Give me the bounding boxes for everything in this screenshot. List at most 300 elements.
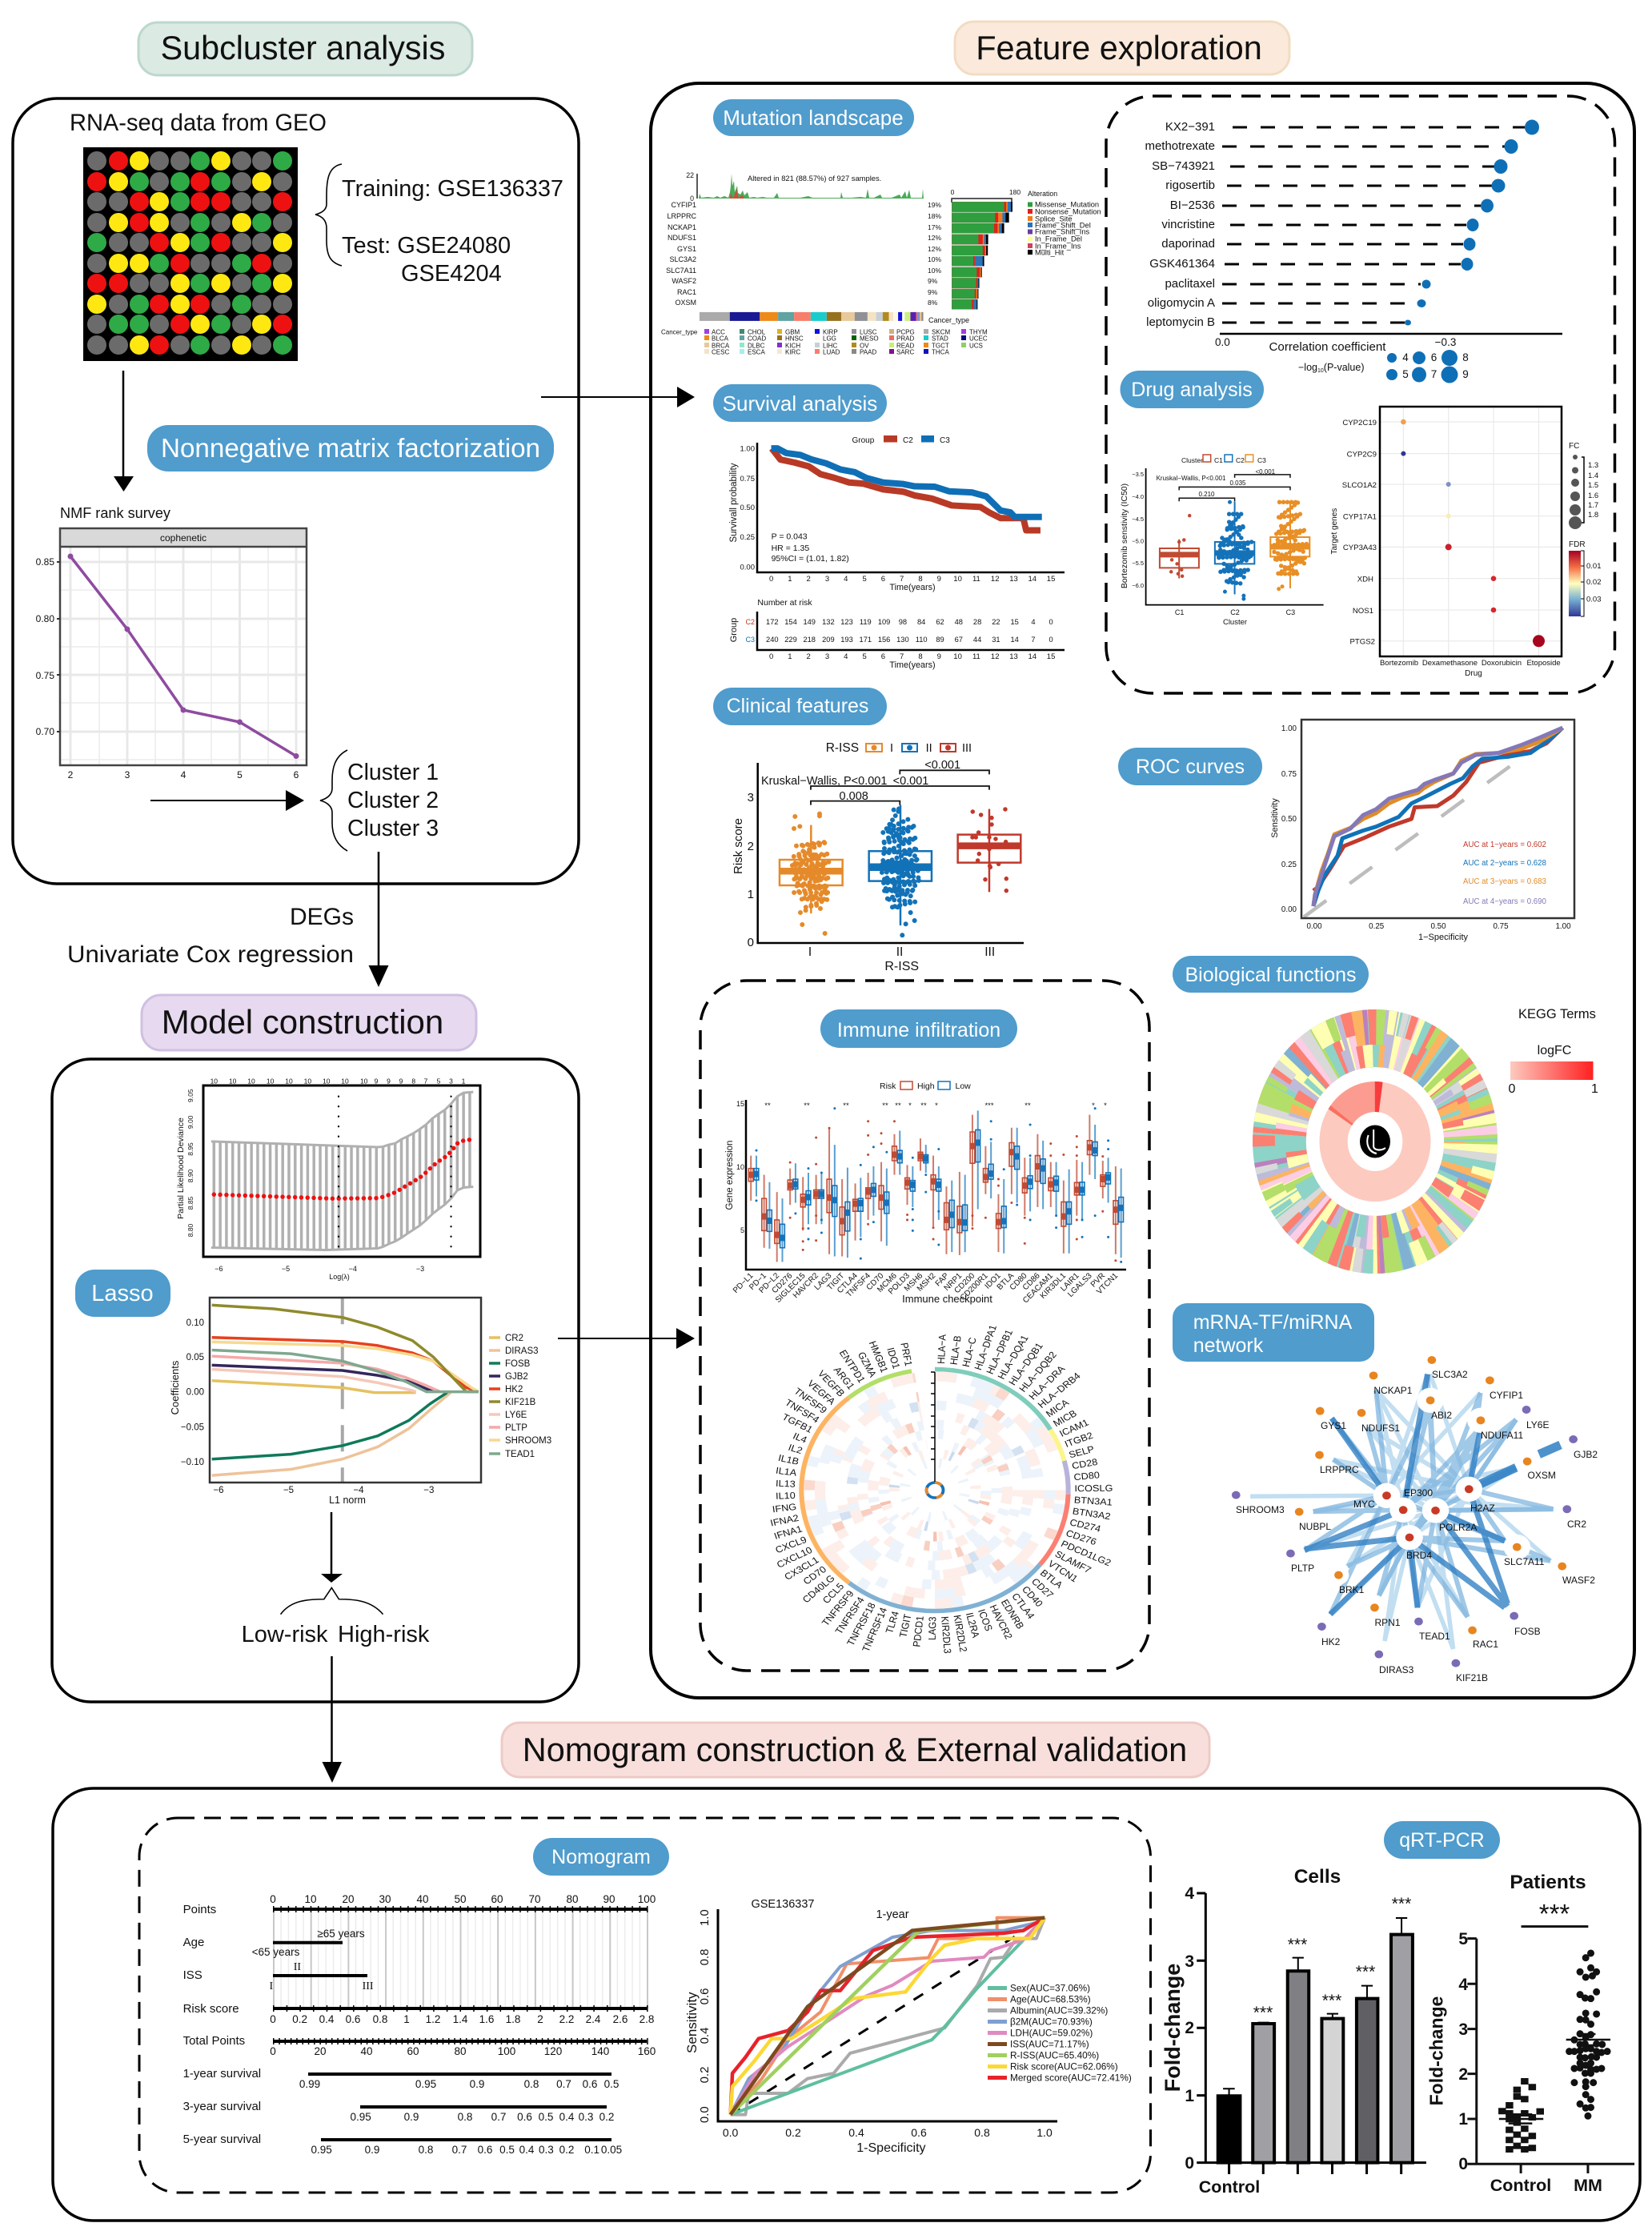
chart: immune checkpoint boxplot: SIGLEC15: [774, 1271, 808, 1305]
table: number at risk: 218: [803, 636, 816, 644]
chart: target genes dot plot: FDR: [1569, 540, 1586, 549]
table: number at risk: 132: [822, 618, 835, 626]
label pill: qRT-PCR: [1384, 1821, 1500, 1859]
chart: oncoplot mutation landscape: 12%: [928, 234, 941, 242]
text: cluster list: [347, 760, 439, 841]
table: number at risk: 8: [918, 652, 923, 661]
chart: target genes dot plot: Dexamethasone: [1422, 659, 1478, 668]
heading: Model construction: [142, 995, 476, 1050]
heading: Feature exploration: [955, 22, 1289, 74]
chart: oncoplot mutation landscape: COAD: [748, 335, 766, 343]
chart: circular immune gene heatmap: IFNG: [772, 1501, 797, 1515]
chart: nomogram scales: 0.1: [584, 2144, 599, 2156]
chart: oncoplot mutation landscape: 8%: [928, 299, 938, 307]
chart: nomogram scales: 0.6: [583, 2078, 597, 2090]
arrow: subcluster to model construction: [368, 852, 389, 987]
chart: target genes dot plot: Drug: [1465, 669, 1482, 678]
text: DEGs: DEGs: [290, 904, 354, 930]
chart: lasso cross-validation deviance: 8.95: [186, 1142, 194, 1156]
chart: nomogram scales: Total Points: [183, 2034, 245, 2048]
chart: mRNA-TF/miRNA network: CYFIP1: [1490, 1390, 1523, 1401]
chart: NMF rank survey: 6: [294, 769, 299, 780]
label pill: Mutation landscape: Mutation landscape: [723, 106, 904, 130]
chart: Bortezomib sensitivity boxplot: Cluster: [1181, 456, 1203, 464]
chart: lasso coefficient paths: [169, 1298, 551, 1506]
chart: lasso coefficient paths: GJB2: [505, 1372, 528, 1382]
chart: drug correlation lollipop: 7: [1431, 368, 1437, 380]
chart: nomogram scales: 0: [270, 2045, 276, 2057]
chart: risk score by R-ISS: 0.008: [840, 790, 868, 803]
chart: patients fold-change scatter: ***: [1539, 1899, 1570, 1928]
chart: immune checkpoint boxplot: CTLA4: [836, 1271, 860, 1295]
chart: target genes dot plot: Bortezomib: [1380, 659, 1418, 668]
chart: NMF rank survey: 0.70: [36, 726, 54, 737]
heading: Feature exploration: Feature exploration: [976, 29, 1262, 66]
label pill: Survival analysis: Survival analysis: [723, 391, 877, 415]
chart: lasso coefficient paths: −0.10: [181, 1458, 204, 1467]
chart: circular immune gene heatmap: KIR2DL3: [939, 1616, 953, 1654]
chart: lasso coefficient paths: −6: [213, 1486, 224, 1495]
chart: circular immune gene heatmap: HLA−DQB1: [1006, 1341, 1045, 1387]
arrow: risk groups to nomogram: [322, 1656, 342, 1783]
chart: oncoplot mutation landscape: 10%: [928, 255, 941, 263]
chart: oncoplot mutation landscape: In_Frame_Ins: [1035, 242, 1081, 250]
chart: Bortezomib sensitivity boxplot: Bortezomib senstivity (IC50): [1120, 484, 1129, 588]
table: number at risk: 11: [972, 652, 980, 661]
text: Low-risk High-risk: Low-risk: [242, 1622, 328, 1647]
chart: immune checkpoint boxplot: CEACAM1: [1021, 1271, 1055, 1305]
table: number at risk: 84: [917, 618, 925, 626]
chart: nomogram scales: 60: [407, 2045, 419, 2057]
label pill: Lasso: Lasso: [91, 1281, 154, 1306]
chart: circular immune gene heatmap: ENTPD1: [837, 1348, 868, 1385]
chart: oncoplot mutation landscape: Altered in 821 (88.57%) of 927 samples.: [748, 174, 881, 183]
chart: cells fold-change bars: ***: [1253, 2004, 1273, 2022]
chart: NMF rank survey: 0.80: [36, 613, 54, 624]
arrow: lasso to risk groups: [321, 1512, 343, 1583]
label pill: Biological functions: [1173, 956, 1369, 993]
legend: KEGG Terms logFC: 1: [1591, 1082, 1598, 1096]
chart: cells fold-change bars: Control: [1199, 2177, 1260, 2197]
chart: drug correlation lollipop: Correlation coefficient: [1269, 340, 1386, 354]
chart: oncoplot mutation landscape: 19%: [928, 201, 941, 209]
chart: mRNA-TF/miRNA network: SHROOM3: [1236, 1504, 1285, 1515]
label pill: Immune infiltration: [820, 1009, 1017, 1048]
chart: nomogram scales: 1-year survival: [183, 2067, 261, 2081]
table: number at risk: 4: [1031, 618, 1036, 626]
chart: oncoplot mutation landscape: 0: [951, 188, 955, 196]
chart: mRNA-TF/miRNA network: [1232, 1356, 1598, 1683]
chart: GSE136337 1-year ROC comparison: [684, 1898, 1132, 2155]
panel: drug dashed box: [1106, 96, 1615, 693]
chart: nomogram scales: 40: [416, 1893, 429, 1905]
chart: oncoplot mutation landscape: NCKAP1: [668, 223, 696, 231]
chart: circular immune gene heatmap: HLA−B: [948, 1335, 964, 1366]
chart: circular immune gene heatmap: IFNA1: [772, 1523, 804, 1542]
chart: drug correlation lollipop: 10: [1317, 368, 1324, 374]
chart: nomogram scales: 0.5: [604, 2078, 619, 2090]
chart: mRNA-TF/miRNA network: ABI2: [1431, 1410, 1452, 1421]
table: number at risk: 156: [878, 636, 890, 644]
chart: ROC curves: 1.00: [1555, 922, 1571, 931]
chart: circular immune gene heatmap: CD40: [1020, 1584, 1045, 1609]
chart: oncoplot mutation landscape: WASF2: [672, 277, 696, 285]
text: cluster list: Cluster 2: [347, 788, 439, 813]
table: number at risk: 0: [769, 652, 773, 661]
chart: nomogram scales: 3-year survival: [183, 2100, 261, 2113]
chart: immune checkpoint boxplot: **: [764, 1101, 771, 1110]
chart: circular immune gene heatmap: TNFRSF14: [860, 1606, 889, 1653]
chart: circular immune gene heatmap: HLA−DQB2: [1016, 1350, 1059, 1394]
text: dataset list: GSE4204: [401, 261, 502, 287]
chart: GSE136337 1-year ROC comparison: R-ISS(AUC=65.40%): [1010, 2050, 1099, 2061]
chart: circular immune gene heatmap: IDO1: [884, 1346, 902, 1370]
chart: circular immune gene heatmap: IL13: [776, 1478, 796, 1490]
table: number at risk: 14: [1028, 652, 1037, 661]
chart: mRNA-TF/miRNA network: HK2: [1321, 1636, 1341, 1647]
chart: circular immune gene heatmap: BTN3A1: [1073, 1495, 1113, 1507]
chart: GSE136337 1-year ROC comparison: Sex(AUC=37.06%): [1010, 1982, 1090, 1993]
chart: nomogram scales: 0.7: [491, 2111, 506, 2123]
chart: immune checkpoint boxplot: CD200R1: [959, 1271, 990, 1302]
chart: lasso cross-validation deviance: 10: [323, 1077, 331, 1085]
table: number at risk: 22: [992, 618, 1000, 626]
chart: circular immune gene heatmap: PDCD1: [911, 1615, 926, 1647]
chart: oncoplot mutation landscape: 10%: [928, 267, 941, 275]
chart: circular immune gene heatmap: HLA−A: [936, 1334, 948, 1364]
chart: nomogram scales: 0.8: [373, 2013, 387, 2025]
chart: drug correlation lollipop: vincristine: [1161, 218, 1215, 231]
chart: drug correlation lollipop: SB−743921: [1152, 159, 1215, 173]
chart: nomogram scales: 0.4: [319, 2013, 335, 2025]
chart: Bortezomib sensitivity boxplot: Kruskal−Wallis, P<0.001: [1157, 475, 1226, 482]
chart: risk score by R-ISS: 3: [748, 791, 754, 805]
chart: lasso coefficient paths: 0.05: [186, 1353, 204, 1362]
table: number at risk: Time(years): [889, 660, 936, 670]
chart: drug correlation lollipop: paclitaxel: [1165, 277, 1215, 291]
label pill: Nomogram: [533, 1838, 669, 1876]
table: number at risk: C3: [745, 636, 755, 644]
chart: risk score by R-ISS: II: [926, 742, 932, 755]
chart: Bortezomib sensitivity boxplot: 0.210: [1198, 491, 1215, 498]
chart: NMF rank survey: 3: [125, 769, 130, 780]
arrow: subcluster to feature exploration: [541, 387, 695, 407]
chart: patients fold-change scatter: [1426, 1872, 1634, 2195]
chart: Kaplan-Meier survival curves: 9: [937, 575, 941, 584]
chart: Kaplan-Meier survival curves: 10: [953, 575, 962, 584]
chart: circular immune gene heatmap: HLA−DRB4: [1036, 1370, 1083, 1410]
chart: Bortezomib sensitivity boxplot: 0.035: [1229, 480, 1246, 487]
chart: immune checkpoint boxplot: KIR3DL1: [1039, 1271, 1069, 1301]
chart: oncoplot mutation landscape: Cancer_type: [928, 316, 969, 324]
chart: oncoplot mutation landscape: LIHC: [823, 343, 837, 349]
chart: NMF rank survey: 5: [237, 769, 243, 780]
chart: immune checkpoint boxplot: MSH6: [903, 1271, 925, 1294]
chart: NMF rank survey: 0.75: [36, 670, 54, 681]
chart: nomogram scales: 80: [454, 2045, 467, 2057]
chart: ROC curves: AUC at 2−years = 0.628: [1463, 859, 1546, 868]
chart: immune checkpoint boxplot: **: [843, 1101, 849, 1110]
chart: nomogram scales: 0.9: [404, 2111, 419, 2123]
chart: Bortezomib sensitivity boxplot: −5.5: [1132, 560, 1144, 567]
chart: NMF rank survey: cophenetic: [160, 532, 206, 544]
chart: Kaplan-Meier survival curves: C2: [903, 436, 913, 445]
table: number at risk: 7: [900, 652, 904, 661]
chart: circular immune gene heatmap: IL1A: [775, 1465, 798, 1479]
text: dataset list: Test: GSE24080: [342, 233, 511, 259]
legend: KEGG Terms logFC: logFC: [1538, 1044, 1571, 1057]
chart: lasso cross-validation deviance: 5: [437, 1077, 441, 1085]
chart: immune checkpoint boxplot: Immune checkpoint: [902, 1293, 992, 1305]
chart: oncoplot mutation landscape: Multi_Hit: [1035, 248, 1065, 256]
chart: nomogram scales: ≥65 years: [317, 1928, 365, 1940]
chart: Bortezomib sensitivity boxplot: −4.5: [1132, 516, 1144, 523]
chart: nomogram scales: 2.6: [613, 2013, 628, 2025]
chart: oncoplot mutation landscape: KIRP: [823, 328, 838, 336]
chart: oncoplot mutation landscape: Splice_Site: [1035, 215, 1073, 223]
table: number at risk: 14: [1011, 636, 1019, 644]
table: number at risk: 193: [840, 636, 853, 644]
chart: immune checkpoint boxplot: CD70: [865, 1271, 886, 1292]
chart: circular immune gene heatmap: MICB: [1051, 1408, 1079, 1429]
chart: oncoplot mutation landscape: TGCT: [932, 343, 949, 349]
chart: nomogram scales: 160: [638, 2045, 656, 2057]
chart: immune checkpoint boxplot: *: [1092, 1101, 1095, 1110]
chart: circular immune gene heatmap: TGFB1: [780, 1411, 815, 1435]
chart: oncoplot mutation landscape: LUAD: [823, 349, 840, 355]
chart: lasso coefficient paths: TEAD1: [505, 1450, 535, 1459]
chart: circular immune gene heatmap: ARG1: [831, 1365, 857, 1391]
chart: ROC curves: 0.50: [1430, 922, 1446, 931]
chart: Kaplan-Meier survival curves: 95%CI = (1.01, 1.82): [772, 554, 849, 564]
chart: oncoplot mutation landscape: SKCM: [932, 328, 950, 336]
chart: oncoplot mutation landscape: SLC3A2: [669, 255, 696, 263]
chart: circular immune gene heatmap: BTN3A2: [1072, 1506, 1112, 1522]
chart: Bortezomib sensitivity boxplot: C2: [1236, 456, 1245, 464]
chart: circular immune gene heatmap: LAG3: [926, 1616, 939, 1640]
chart: immune checkpoint boxplot: Low: [956, 1081, 971, 1091]
table: number at risk: 172: [766, 618, 779, 626]
chart: Kaplan-Meier survival curves: 0.25: [740, 533, 755, 542]
chart: circular immune gene heatmap: HLA−DPA1: [972, 1323, 999, 1371]
chart: circular immune gene heatmap: VEGFA: [805, 1378, 838, 1407]
chart: circular immune gene heatmap: CD274: [1069, 1517, 1102, 1535]
chart: mRNA-TF/miRNA network: RPN1: [1375, 1617, 1401, 1628]
chart: mRNA-TF/miRNA network: NCKAP1: [1373, 1385, 1413, 1396]
chart: drug correlation lollipop: 8: [1462, 351, 1469, 363]
chart: immune checkpoint boxplot: POLD3: [887, 1271, 912, 1296]
chart: lasso cross-validation deviance: Partial Likelihood Deviance: [176, 1118, 186, 1219]
table: number at risk: Group: [729, 618, 739, 642]
table: number at risk: 240: [766, 636, 779, 644]
chart: patients fold-change scatter: 1: [1458, 2110, 1468, 2129]
chart: immune checkpoint boxplot: *: [935, 1101, 938, 1110]
chart: Kaplan-Meier survival curves: 11: [972, 575, 980, 584]
chart: circular immune gene heatmap: TLR4: [883, 1610, 901, 1635]
chart: drug correlation lollipop: daporinad: [1161, 237, 1215, 251]
chart: GSE136337 1-year ROC comparison: 0.2: [698, 2067, 712, 2083]
chart: nomogram scales: 0.9: [470, 2078, 484, 2090]
chart: nomogram scales: 0: [270, 1893, 276, 1905]
chart: ROC curves: AUC at 4−years = 0.690: [1463, 897, 1547, 906]
chart: circular immune gene heatmap: MICA: [1044, 1397, 1072, 1419]
chart: nomogram scales: [183, 1893, 656, 2156]
chart: oncoplot mutation landscape: HNSC: [785, 335, 804, 343]
table: number at risk: Number at risk: [757, 598, 812, 608]
chart: oncoplot mutation landscape: Frame_Shift_Del: [1035, 221, 1091, 229]
chart: nomogram scales: 50: [454, 1893, 467, 1905]
chart: risk score by R-ISS: <0.001: [893, 775, 928, 788]
chart: circular immune gene heatmap: HLA−DPB1: [984, 1328, 1015, 1376]
chart: cells fold-change bars: ***: [1322, 1992, 1341, 2010]
chart: oncoplot mutation landscape: OV: [860, 343, 869, 349]
chart: GSE136337 1-year ROC comparison: 0.4: [698, 2028, 712, 2044]
chart: immune checkpoint boxplot: [725, 1081, 1126, 1305]
chart: mRNA-TF/miRNA network: KIF21B: [1456, 1672, 1488, 1683]
chart: drug correlation lollipop: 5: [1402, 368, 1409, 380]
chart: nomogram scales: 0.4: [519, 2144, 535, 2156]
chart: mRNA-TF/miRNA network: H2AZ: [1470, 1503, 1495, 1514]
text: dataset list: Training: GSE136337: [342, 176, 563, 202]
chart: mRNA-TF/miRNA network: NUBPL: [1299, 1521, 1331, 1532]
chart: circular immune gene heatmap: HAVCR2: [987, 1603, 1015, 1641]
chart: drug correlation lollipop: 0.0: [1215, 336, 1230, 348]
chart: circular immune gene heatmap: CD28: [1071, 1456, 1099, 1471]
chart: drug correlation lollipop: 6: [1431, 351, 1437, 363]
chart: nomogram scales: 0.8: [524, 2078, 539, 2090]
chart: Kaplan-Meier survival curves: 2: [807, 575, 811, 584]
chart: Bortezomib sensitivity boxplot: −6.0: [1132, 582, 1144, 589]
chart: oncoplot mutation landscape: Alteration: [1028, 190, 1057, 198]
chart: risk score by R-ISS: <0.001: [924, 759, 960, 772]
panel: feature exploration box: [651, 83, 1634, 1698]
label pill: mRNA-TF/miRNA network: mRNA-TF/miRNA: [1193, 1311, 1353, 1334]
chart: cells fold-change bars: 1: [1185, 2087, 1194, 2105]
label pill: Survival analysis: [713, 384, 887, 422]
chart: circular immune gene heatmap: BTLA: [1038, 1567, 1065, 1591]
chart: ROC curves: 1.00: [1281, 724, 1297, 733]
chart: oncoplot mutation landscape: In_Frame_Del: [1035, 235, 1082, 243]
chart: mRNA-TF/miRNA network: SLC3A2: [1432, 1369, 1468, 1380]
chart: nomogram scales: 1.6: [479, 2013, 494, 2025]
label pill: Clinical features: [713, 688, 887, 725]
chart: Kaplan-Meier survival curves: 0.75: [740, 475, 755, 484]
chart: Kaplan-Meier survival curves: 8: [918, 575, 923, 584]
chart: lasso cross-validation deviance: 10: [247, 1077, 255, 1085]
chart: immune checkpoint boxplot: LAG3: [813, 1271, 834, 1292]
chart: mRNA-TF/miRNA network: SLC7A11: [1504, 1556, 1545, 1567]
chart: nomogram scales: 1.4: [453, 2013, 468, 2025]
chart: ROC curves: Sensitivity: [1270, 798, 1280, 838]
chart: nomogram scales: 0.4: [559, 2111, 575, 2123]
chart: risk score by R-ISS: I: [808, 945, 812, 959]
label pill: Biological functions: Biological functions: [1185, 964, 1357, 986]
chart: circular immune gene heatmap: HLA−DQA1: [996, 1333, 1031, 1381]
chart: lasso coefficient paths: Coefficients: [169, 1360, 181, 1414]
chart: patients fold-change scatter: 4: [1458, 1976, 1468, 1994]
chart: GSE136337 1-year ROC comparison: 0.4: [848, 2126, 864, 2139]
chart: immune checkpoint boxplot: CD200: [953, 1271, 977, 1295]
chart: drug correlation lollipop: −0.3: [1435, 336, 1456, 348]
chart: circular immune gene heatmap: CTLA4: [1009, 1591, 1037, 1621]
chart: circular immune gene heatmap: ITGB2: [1063, 1430, 1095, 1450]
chart: Bortezomib sensitivity boxplot: C3: [1257, 456, 1266, 464]
chart: circular immune gene heatmap: HMGB1: [867, 1339, 891, 1374]
chart: circular immune gene heatmap: TNFRSF4: [833, 1595, 867, 1636]
chart: risk score by R-ISS: [732, 741, 1024, 973]
chart: drug correlation lollipop: (P-value): [1324, 362, 1364, 373]
chart: target genes dot plot: XDH: [1357, 575, 1373, 584]
chart: lasso cross-validation deviance: 10: [341, 1077, 349, 1085]
table: number at risk: 89: [936, 636, 944, 644]
chart: circular immune gene heatmap: TNFRSF9: [820, 1588, 856, 1628]
chart: oncoplot mutation landscape: THCA: [932, 349, 949, 355]
chart: oncoplot mutation landscape: NDUFS1: [668, 234, 696, 242]
chart: ROC curves: 0.00: [1281, 905, 1297, 914]
chart: cells fold-change bars: Cells: [1294, 1866, 1341, 1888]
chart: nomogram scales: I: [269, 1980, 273, 1992]
chart: circular immune gene heatmap: TIGIT: [897, 1613, 914, 1639]
chart: nomogram scales: 100: [638, 1893, 656, 1905]
chart: immune checkpoint boxplot: **: [920, 1101, 927, 1110]
chart: GSE136337 1-year ROC comparison: Age(AUC=68.53%): [1010, 1994, 1091, 2005]
chart: oncoplot mutation landscape: BRCA: [712, 343, 730, 349]
chart: ROC curves: 0.75: [1493, 922, 1509, 931]
chart: target genes dot plot: 1.6: [1588, 492, 1598, 500]
chart: ROC curves: 0.75: [1281, 770, 1297, 779]
chart: target genes dot plot: PTGS2: [1350, 637, 1375, 647]
chart: target genes dot plot: 0.02: [1586, 578, 1601, 587]
chart: Kaplan-Meier survival curves: [729, 435, 1065, 592]
chart: cells fold-change bars: ***: [1392, 1895, 1411, 1913]
chart: oncoplot mutation landscape: SARC: [896, 349, 914, 355]
chart: immune checkpoint boxplot: BTLA: [996, 1271, 1016, 1292]
chart: nomogram scales: 0.6: [517, 2111, 532, 2123]
chart: nomogram scales: 140: [591, 2045, 609, 2057]
chart: nomogram scales: 10: [304, 1893, 317, 1905]
table: number at risk: 48: [955, 618, 963, 626]
table: number at risk: 4: [844, 652, 848, 661]
chart: oncoplot mutation landscape: Cancer_type: [661, 328, 698, 336]
chart: mRNA-TF/miRNA network: OXSM: [1527, 1470, 1556, 1481]
chart: ROC curves: 0.25: [1369, 922, 1385, 931]
heading: Subcluster analysis: [138, 22, 472, 75]
chart: drug correlation lollipop: KX2−391: [1165, 120, 1215, 134]
chart: drug correlation lollipop: BI−2536: [1170, 199, 1215, 212]
chart: ROC curves: [1270, 720, 1574, 942]
chart: oncoplot mutation landscape: 22: [686, 171, 694, 179]
legend: KEGG Terms logFC: KEGG Terms: [1518, 1007, 1596, 1021]
chart: cells fold-change bars: 3: [1185, 1952, 1194, 1971]
chart: circular immune gene heatmap: TNFSF4: [783, 1397, 822, 1425]
chart: cells fold-change bars: 0: [1185, 2154, 1194, 2173]
chart: mRNA-TF/miRNA network: FOSB: [1514, 1626, 1541, 1637]
chart: oncoplot mutation landscape: 12%: [928, 245, 941, 253]
chart: immune checkpoint boxplot: **: [804, 1101, 810, 1110]
chart: risk score by R-ISS: I: [890, 742, 893, 755]
chart: nomogram scales: 30: [379, 1893, 391, 1905]
chart: risk score by R-ISS: III: [984, 945, 995, 959]
label pill: Nonnegative matrix factorization: [147, 425, 554, 471]
panel: model construction box: [52, 1059, 579, 1702]
chart: circular immune gene heatmap: IL2RA: [964, 1611, 982, 1639]
chart: NMF rank survey: NMF rank survey: [60, 505, 170, 521]
chart: circular immune gene heatmap: TNFSF9: [792, 1386, 829, 1416]
chart: lasso cross-validation deviance: 9: [375, 1077, 379, 1085]
chart: GSE136337 1-year ROC comparison: 0.0: [698, 2106, 712, 2123]
table: number at risk: C2: [745, 618, 755, 626]
chart: target genes dot plot: 1.4: [1588, 471, 1598, 480]
